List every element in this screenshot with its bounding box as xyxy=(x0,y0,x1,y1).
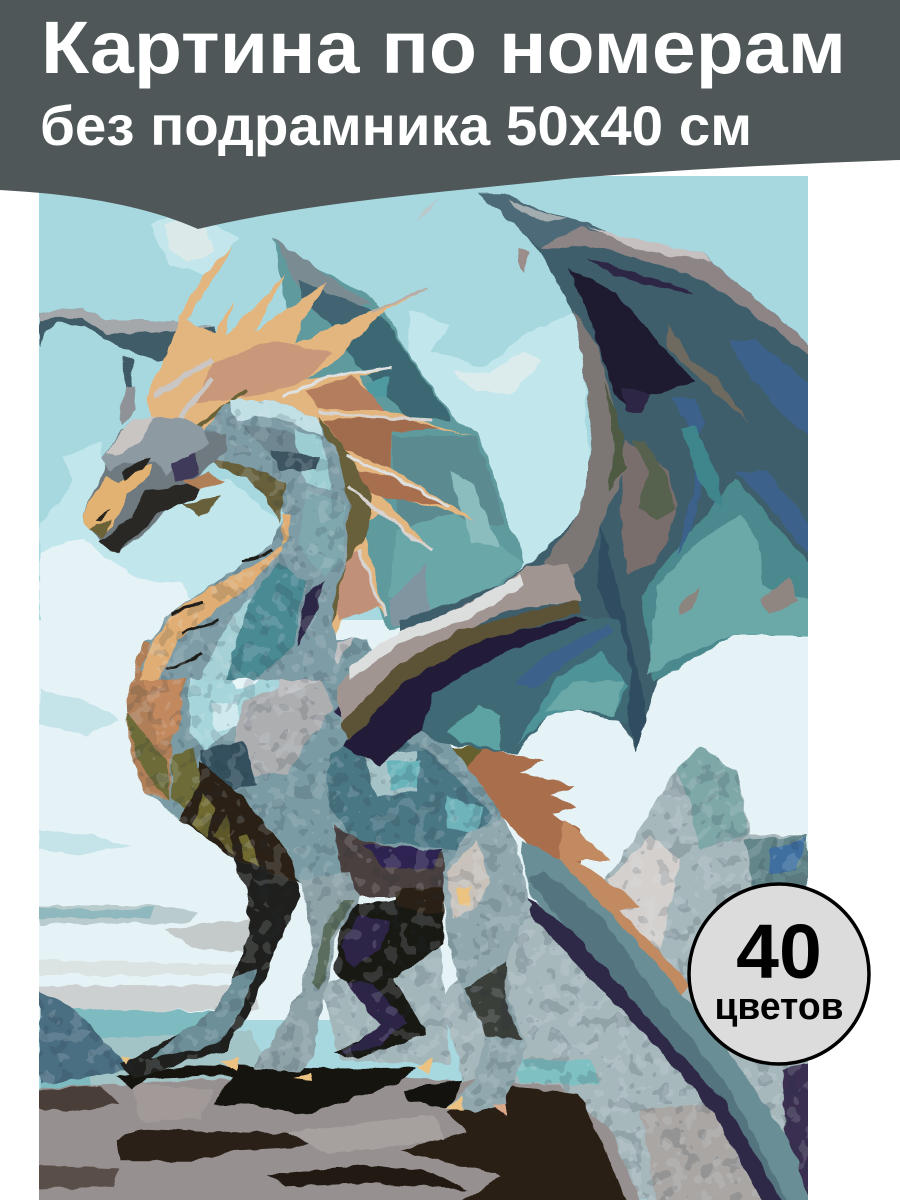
snout xyxy=(82,463,152,537)
badge number: 40 xyxy=(736,909,822,995)
dark blue shade xyxy=(200,740,257,794)
near hind leg xyxy=(443,818,530,1111)
chest highlight xyxy=(188,678,280,750)
far legs xyxy=(120,858,443,1079)
far wing xyxy=(39,198,525,630)
subtitle: без подрамника 50х40 см xyxy=(40,94,752,157)
wing arm xyxy=(336,563,581,727)
near wing xyxy=(336,193,815,766)
far hind leg xyxy=(333,897,443,1058)
rock ledge xyxy=(30,1065,650,1200)
rib region xyxy=(326,742,494,850)
left wing edge xyxy=(544,310,628,582)
header banner xyxy=(0,0,900,229)
crest and frill xyxy=(146,247,476,633)
dark upper panel xyxy=(568,268,695,410)
far wing left arm xyxy=(39,307,216,360)
dragon head xyxy=(82,417,226,553)
jaw xyxy=(99,473,209,553)
white spike lines xyxy=(282,368,392,397)
underside xyxy=(180,761,300,883)
blue patches xyxy=(730,339,808,434)
tail body xyxy=(520,840,815,1200)
shoulder shadow xyxy=(334,706,342,717)
big teal panel xyxy=(648,513,815,674)
nostril xyxy=(96,508,109,520)
belly band xyxy=(127,640,190,801)
wing spine xyxy=(598,524,646,752)
far front leg xyxy=(120,858,300,1079)
far wing membrane xyxy=(272,237,525,630)
lower teal edge xyxy=(641,479,815,681)
wing membrane xyxy=(400,193,815,754)
near front leg xyxy=(253,872,360,1072)
mottled grey flank xyxy=(233,676,333,776)
eye xyxy=(121,457,152,480)
brown patch xyxy=(621,440,678,574)
under-arm area xyxy=(400,616,631,754)
head top xyxy=(102,417,209,477)
torso silhouette xyxy=(126,638,532,906)
dragon claws xyxy=(120,1058,505,1117)
top finger xyxy=(477,193,614,249)
sky xyxy=(39,176,808,1200)
small claw at top xyxy=(417,198,440,222)
title: Картина по номерам xyxy=(41,6,846,89)
distant mountains xyxy=(39,745,815,1200)
tail shadow xyxy=(525,895,790,1200)
dragon neck xyxy=(139,400,349,680)
dragon body xyxy=(127,640,533,1111)
belly shadow xyxy=(333,826,447,897)
back and tail spines xyxy=(452,745,581,864)
painting: dragon on mountain landscape xyxy=(30,176,815,1200)
tail xyxy=(440,747,815,1200)
clouds xyxy=(39,210,600,1090)
badge label: цветов xyxy=(714,986,844,1028)
badge: 40 colours xyxy=(689,884,869,1064)
